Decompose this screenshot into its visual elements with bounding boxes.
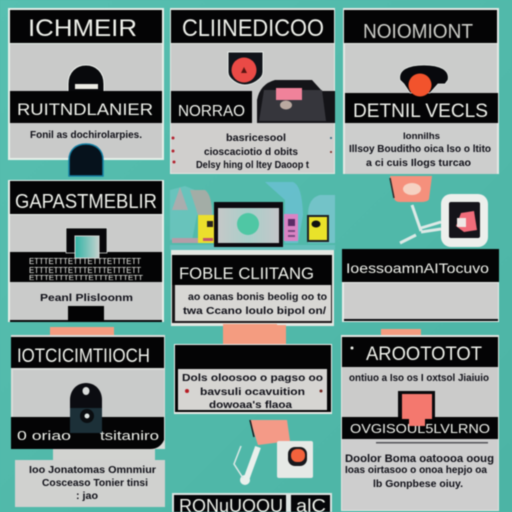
decorative shapes bbox=[170, 182, 335, 250]
heading: middle left: GAPASTMEBLIR bbox=[15, 191, 157, 213]
panel: middle right bbox=[342, 249, 499, 322]
connector: salmon centre bbox=[223, 324, 277, 345]
icon: base block bbox=[68, 306, 104, 322]
text block: a ci cuis Ilogs turcao bbox=[366, 158, 471, 169]
text block: lb Gonpbese oiuy. bbox=[373, 479, 463, 490]
panel: smart device illustration bbox=[390, 176, 488, 247]
icon: left yellow device bbox=[198, 215, 214, 243]
icon: salmon cup bbox=[390, 176, 432, 202]
heading: middle right: IoessoamnAITocuvo bbox=[346, 260, 489, 276]
icon: right yellow device bbox=[307, 215, 329, 242]
text block: ontiuo a Iso os I oxtsol Jiaiuio bbox=[349, 373, 489, 384]
heading: top right bbox=[344, 10, 497, 43]
heading: top left: ICHMEIR bbox=[28, 15, 137, 42]
connector: salmon top bbox=[223, 325, 286, 344]
text block: dowoaa's flaoa bbox=[209, 400, 292, 411]
bottom heading strip bbox=[172, 493, 332, 512]
connector: salmon right bbox=[381, 329, 421, 337]
divider mark bbox=[376, 442, 488, 444]
icon: dome bbox=[68, 65, 104, 92]
heading: top left bbox=[10, 10, 162, 43]
text block: Doolor Boma oatoooa ooug bbox=[345, 453, 494, 465]
icon: pink device bbox=[284, 214, 298, 241]
text block: basricesool bbox=[226, 133, 286, 144]
text block: bavsuli ocavuition bbox=[200, 387, 305, 398]
text block: Illsoy Bouditho oica lso o ltito bbox=[349, 144, 491, 155]
text block bbox=[345, 453, 494, 490]
panel: top left bbox=[8, 8, 164, 176]
icon: salmon block bbox=[402, 394, 432, 426]
panel: centre illustration bbox=[170, 182, 335, 250]
icon: monitor bbox=[66, 228, 107, 258]
subheading band bbox=[171, 91, 252, 123]
icon black frame bbox=[398, 391, 435, 418]
subheading band bbox=[345, 93, 498, 123]
subheading band: ETTTETTTETTTETTTETTTETT bbox=[29, 275, 144, 282]
heading: bottom right: AROOTOTOT bbox=[366, 344, 482, 365]
heading: bottom left: IOTCICIMTIIOCH bbox=[17, 346, 150, 367]
icon: arm bbox=[400, 205, 441, 243]
heading bbox=[172, 255, 332, 286]
text block bbox=[349, 131, 491, 169]
panel: bottom right bbox=[341, 335, 499, 511]
subheading band bbox=[10, 252, 162, 282]
subheading band: OVGISOUL5LVLRNO bbox=[350, 421, 490, 436]
subheading band: RUITNDLANIER bbox=[17, 100, 153, 119]
icon: monitor bbox=[214, 202, 283, 247]
panel: bottom centre bbox=[174, 325, 332, 414]
panel: focus card bbox=[171, 250, 334, 326]
text block bbox=[183, 292, 327, 317]
subheading band bbox=[342, 417, 498, 439]
icon: device bbox=[257, 80, 335, 123]
heading: bottom left bbox=[11, 337, 164, 368]
subheading band: ETTTETTTETTTETTTETTTETT bbox=[29, 257, 141, 266]
text block: lonnilhs bbox=[403, 131, 440, 141]
panel: bottom left bbox=[11, 335, 165, 507]
panel: middle left bbox=[8, 180, 164, 322]
text block: Ioas oirtasoo o onoa hepjo oa bbox=[345, 465, 487, 476]
text block panel: : jao bbox=[76, 491, 98, 502]
subheading band: 0 oriao bbox=[17, 428, 71, 443]
text block panel bbox=[15, 460, 165, 507]
icon: camera bbox=[70, 383, 102, 433]
subheading band bbox=[10, 91, 162, 123]
text block bbox=[182, 373, 323, 411]
text block bbox=[172, 133, 332, 171]
icon: shield bbox=[228, 52, 263, 85]
panel: top right bbox=[343, 8, 499, 174]
subheading band bbox=[11, 417, 164, 449]
text block: Delsy hing ol ltey Daoop t bbox=[196, 160, 310, 171]
text block panel: Cosceaso Tonier tinsi bbox=[42, 478, 148, 489]
heading: middle left bbox=[10, 181, 162, 214]
heading: middle right bbox=[342, 249, 499, 282]
subheading band: ETTTETTTETTTETTTETTTETT bbox=[29, 266, 141, 275]
heading: bottom right bbox=[342, 337, 498, 367]
text block: Peanl Plisloonm bbox=[40, 293, 133, 304]
subheading band: NORRAO bbox=[178, 103, 245, 120]
heading: FOBLE CLIITANG bbox=[179, 264, 314, 283]
heading: top right: NOIOMIONT bbox=[363, 21, 473, 43]
text block panel: Ioo Jonatomas Omnmiur bbox=[29, 465, 156, 476]
text block: Fonil as dochirolarpies. bbox=[30, 130, 142, 141]
subheading band: DETNIL VECLS bbox=[353, 101, 488, 122]
icon: lower dome bbox=[69, 144, 103, 176]
icon: handset bbox=[400, 65, 448, 96]
panel: top centre bbox=[170, 8, 335, 174]
icon: smart display bbox=[441, 194, 488, 247]
text block: cioscaciotio d obits bbox=[204, 147, 298, 158]
heading: top centre: CLIINEDICOO bbox=[182, 15, 324, 42]
connector: salmon left bbox=[50, 327, 114, 337]
text block: twa Ccano loulo bipol on/ bbox=[183, 306, 326, 317]
text block: Dols oloosoo o pagso oo bbox=[182, 373, 323, 384]
subheading band: tsitaniro bbox=[100, 428, 159, 443]
icon: wrench and device bbox=[234, 420, 313, 485]
text block: ao oanas bonis beolig oo to bbox=[188, 292, 327, 303]
